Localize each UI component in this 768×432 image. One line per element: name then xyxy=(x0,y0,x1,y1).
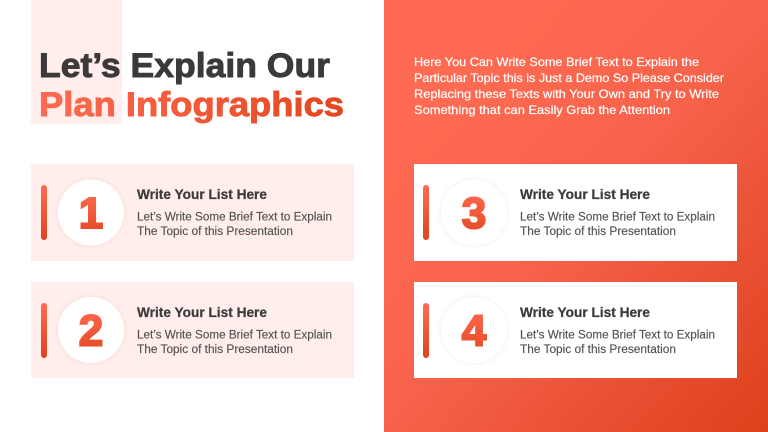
intro text block: Replacing these Texts with Your Own and Try to Write xyxy=(414,87,719,101)
item 1 text: The Topic of this Presentation xyxy=(137,226,293,238)
item 2 text xyxy=(137,305,332,356)
panel: list item 4 xyxy=(414,282,737,378)
number badge 2 xyxy=(58,297,124,363)
number badge 4 xyxy=(441,297,507,363)
item 4 text: Write Your List Here xyxy=(520,305,650,320)
number badge 3: 3 xyxy=(462,189,486,238)
decorative pink title block xyxy=(31,0,122,124)
number badge 2: 2 xyxy=(79,306,103,356)
item 3 text: Let’s Write Some Brief Text to Explain xyxy=(520,212,715,224)
number badge 4: 4 xyxy=(462,306,487,356)
item 1 text: Let’s Write Some Brief Text to Explain xyxy=(137,212,332,224)
panel: list item 3 xyxy=(414,164,737,261)
intro text block: Something that can Easily Grab the Attention xyxy=(414,103,670,117)
item 4 text: Let’s Write Some Brief Text to Explain xyxy=(520,330,715,342)
number badge 3 xyxy=(441,180,507,246)
item 2 text: The Topic of this Presentation xyxy=(137,344,293,356)
accent bar 2 xyxy=(41,303,47,358)
item 3 text xyxy=(520,187,715,238)
accent bar 3 xyxy=(423,185,429,240)
accent bar 4 xyxy=(423,303,429,358)
item 2 text: Write Your List Here xyxy=(137,305,267,320)
item 1 text: Write Your List Here xyxy=(137,187,267,202)
panel: list item 2 xyxy=(31,282,354,378)
item 2 text: Let’s Write Some Brief Text to Explain xyxy=(137,330,332,342)
intro text block: Here You Can Write Some Brief Text to Explain the xyxy=(414,55,699,69)
item 1 text xyxy=(137,187,332,238)
title xyxy=(39,47,344,124)
item 4 text xyxy=(520,305,715,356)
panel: right gradient background xyxy=(384,0,768,432)
panel: list item 1 xyxy=(31,164,354,261)
number badge 1 xyxy=(58,180,124,246)
intro text block: Particular Topic this is Just a Demo So Please Consider xyxy=(414,71,724,85)
title: Let’s Explain Our xyxy=(39,47,330,85)
item 3 text: Write Your List Here xyxy=(520,187,650,202)
accent bar 1 xyxy=(41,185,47,240)
number badge 1: 1 xyxy=(79,189,103,238)
intro text block xyxy=(414,55,724,117)
item 3 text: The Topic of this Presentation xyxy=(520,226,676,238)
item 4 text: The Topic of this Presentation xyxy=(520,344,676,356)
title: Plan Infographics xyxy=(39,86,344,124)
